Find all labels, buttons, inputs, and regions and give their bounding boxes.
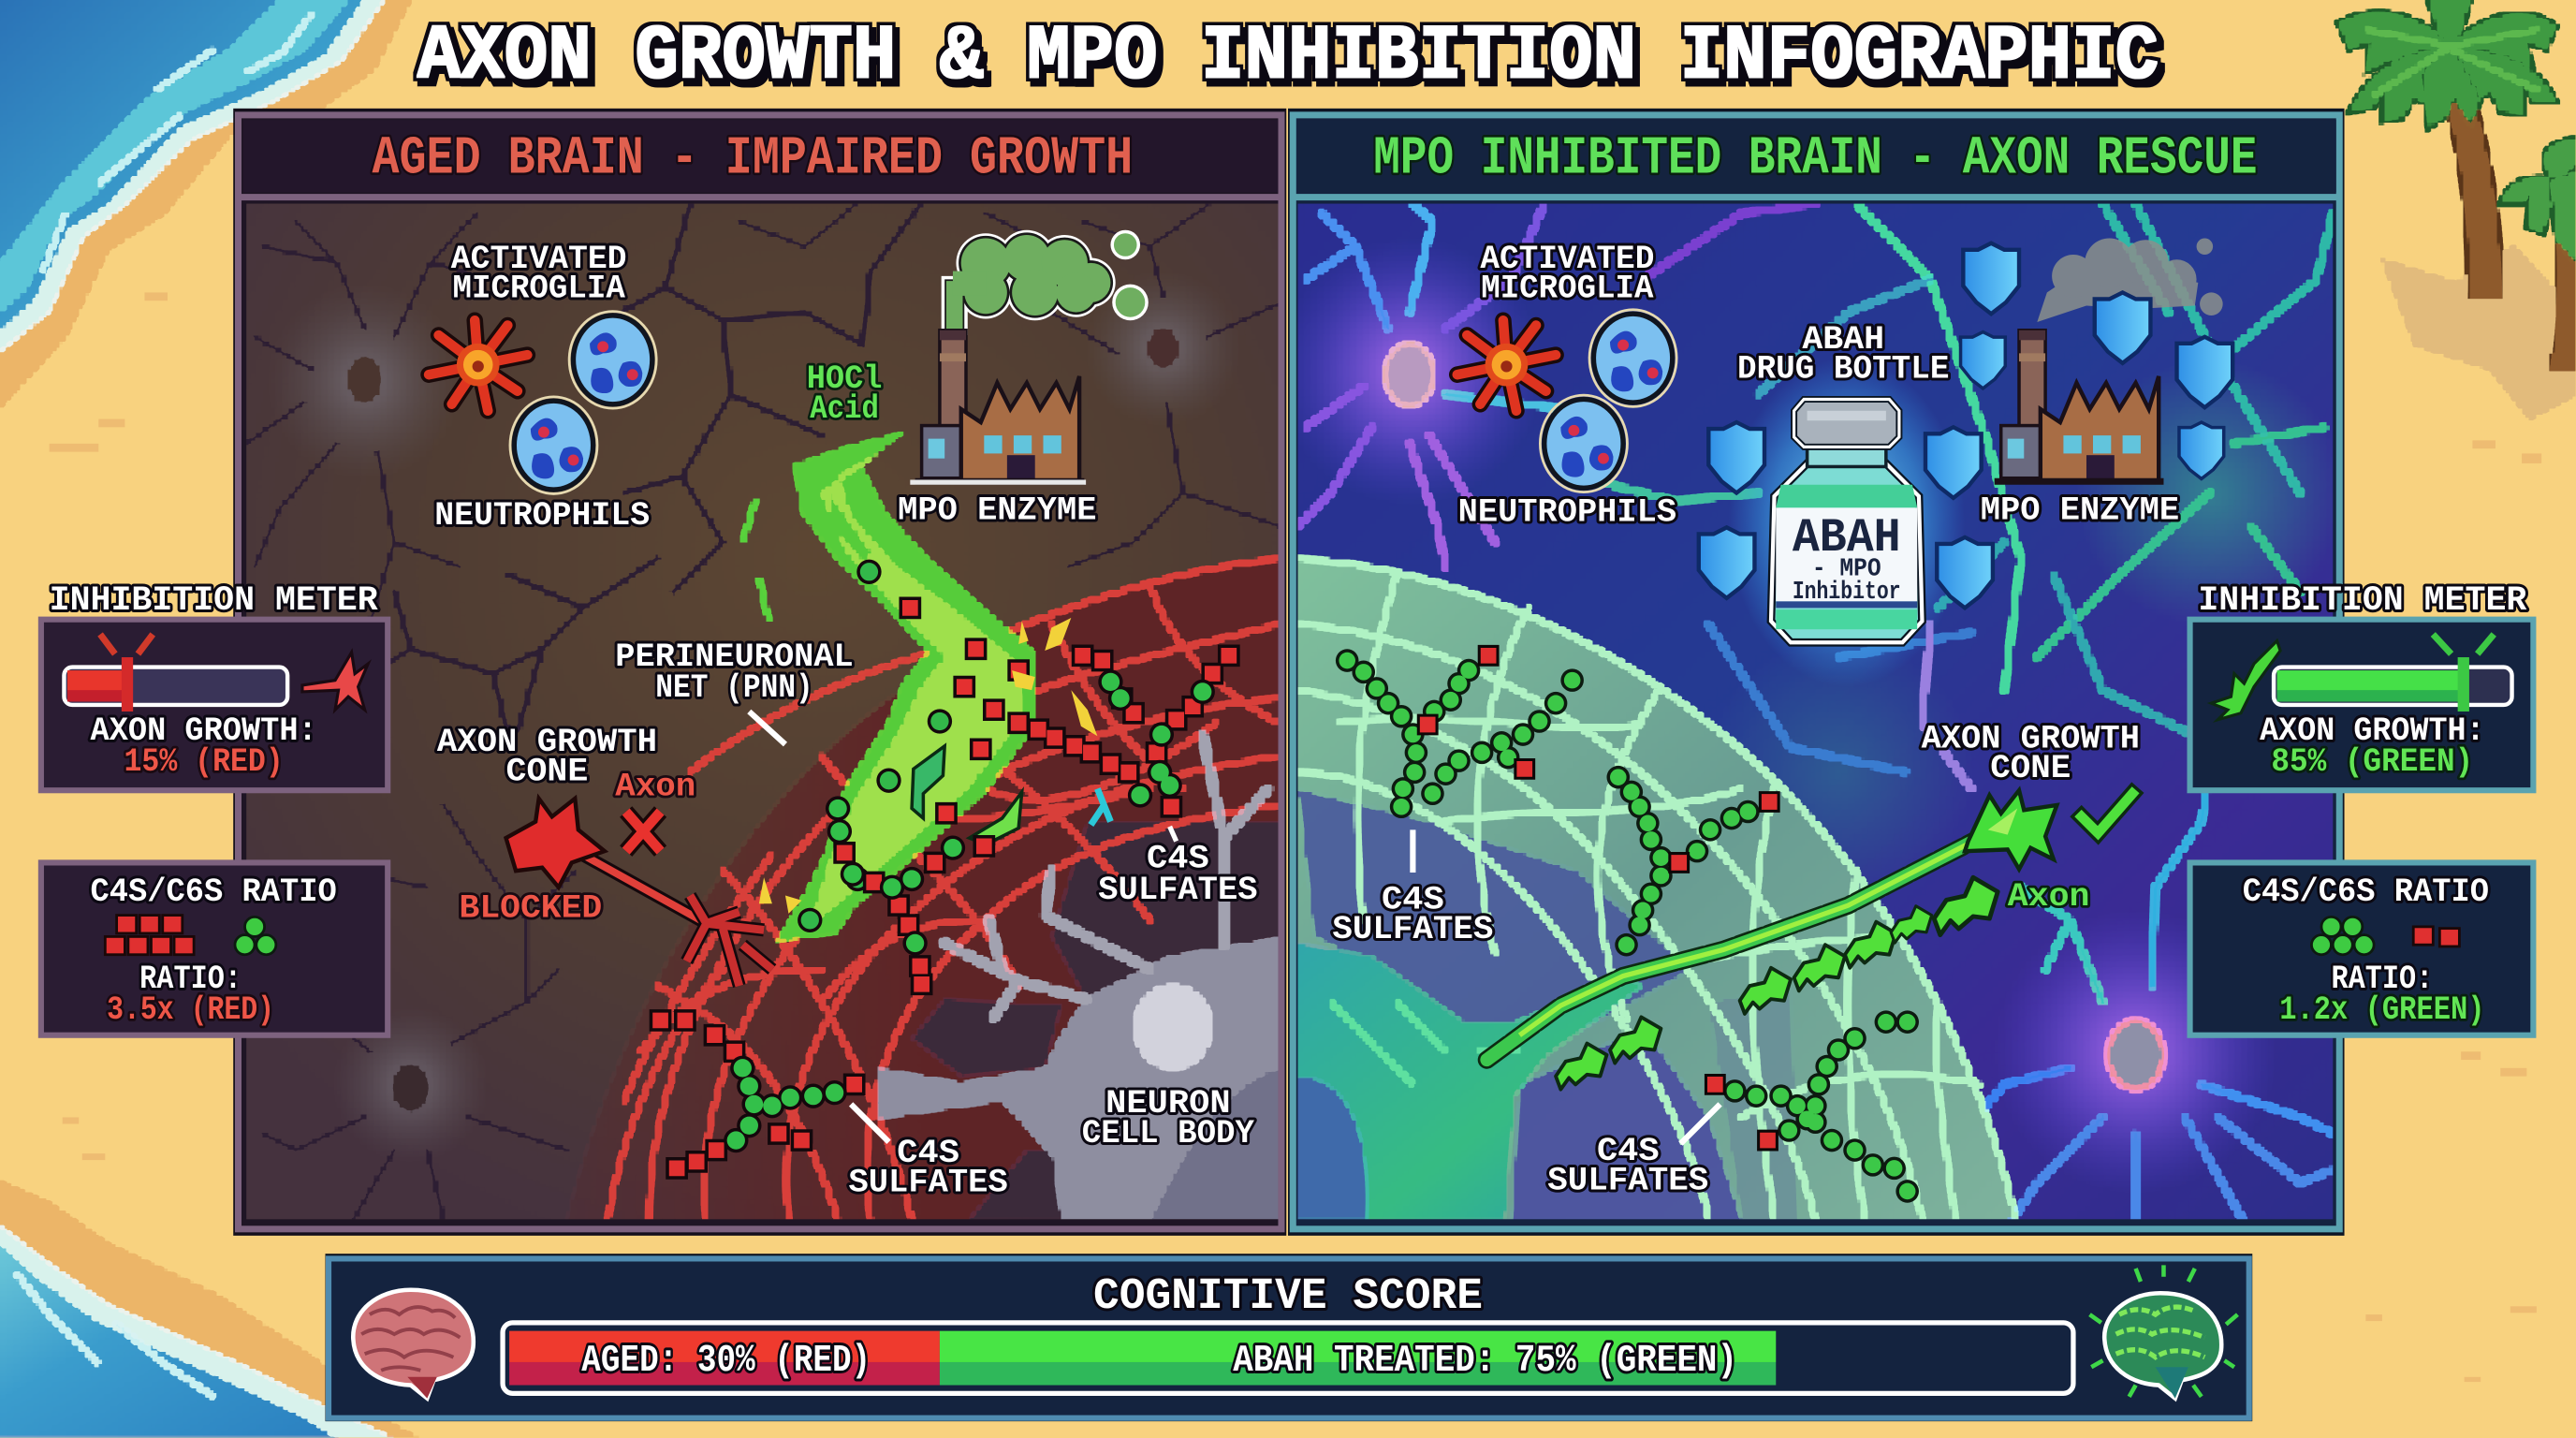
scene: aged brain tissue [246,204,1278,1219]
yellow sparks [759,618,1097,914]
heading: ratio: C4S/C6S RATIO [91,873,337,911]
label: neutrophils right: NEUTROPHILS [1458,493,1676,531]
label: activated microglia [451,241,627,308]
left inhibition meter [41,581,388,790]
chain: c4s center [838,809,984,984]
label: neuron cell body [1082,1085,1254,1152]
tissue background pixel layer [246,204,1278,1219]
heading: aged brain: AGED BRAIN - IMPAIRED GROWTH [373,128,1133,189]
icon: aged brain [353,1290,474,1399]
palm trunk second [2550,198,2576,372]
icon: abah drug bottle [1728,359,1965,687]
label: perineuronal net [615,638,854,707]
heading: ratio right: C4S/C6S RATIO [2243,873,2489,911]
icon: microglia right [1457,320,1556,411]
label: c4s sulfates lower: C4S [897,1135,959,1172]
icon: check mark [2082,794,2132,833]
label: c4s sulfates upper left [1332,882,1493,948]
label: perineuronal net: NET (PNN) [655,669,813,707]
label: axon right: Axon [2008,878,2089,916]
text: 15 percent: 15% (RED) [124,743,284,781]
acid stream arrows [912,746,1022,844]
beach water: top left [0,0,411,407]
scene: rescued brain tissue [1278,204,2341,1219]
icon: neutrophil lower [510,397,597,493]
protective shields [1699,243,2232,608]
icon: microglia left [429,320,527,411]
label: activated microglia right: MICROGLIA [1481,271,1654,308]
red sulfate blocks [2413,927,2459,946]
label: axon growth cone right: CONE [1990,750,2071,787]
icon: blocked x [626,812,661,851]
right inhibition meter [2190,581,2533,790]
text: ratio: RATIO: [2331,961,2433,998]
text: axon growth: AXON GROWTH: [91,712,317,750]
label: axon growth cone right [1922,721,2140,787]
palm trunk main [2443,85,2502,299]
icon: abah drug bottle: - MPO [1812,554,1881,583]
text: ratio value: 1.2x (GREEN) [2279,991,2485,1029]
panel frame right [1288,109,2345,1236]
chain: c4s upper right [1018,655,1229,825]
label: c4s sulfates lower right [1547,1133,1708,1200]
pointer: c4s lower [851,1104,889,1142]
label: activated microglia: MICROGLIA [453,271,626,308]
heading: inhibition meter left: INHIBITION METER [50,581,379,621]
neuron cell body [877,735,1278,1219]
acid stream [742,433,1036,942]
label: c4s sulfates lower [849,1135,1008,1201]
label: hocl acid: Acid [810,390,879,428]
heading: mpo inhibited: MPO INHIBITED BRAIN - AXON RESCUE [1373,128,2258,189]
label: neuron cell body: CELL BODY [1082,1115,1254,1152]
text: 85 percent: 85% (GREEN) [2271,743,2473,781]
teal neuron body [1298,943,1643,1219]
icon: healthy brain [2089,1265,2237,1399]
blocked axon and growth cone [506,799,772,986]
icon: abah drug bottle: Inhibitor [1793,578,1901,607]
label: perineuronal net: PERINEURONAL [615,638,854,676]
label: abah drug bottle: DRUG BOTTLE [1737,351,1949,389]
palm trees [2338,0,2576,419]
label: axon growth cone right: AXON GROWTH [1922,721,2140,758]
panel box [2190,620,2533,790]
panel box [2190,862,2533,1035]
palm fronds second [2500,138,2576,263]
label: activated microglia right [1480,241,1654,308]
text: ratio: RATIO: [139,961,242,998]
acid beads [810,572,1018,920]
green perineuronal net dome [1298,559,2016,1219]
text: axon growth: AXON GROWTH: [2260,712,2485,750]
label: axon growth cone [437,724,657,791]
glowing neurons [1278,204,2341,1219]
beach water: bottom left [0,1181,417,1438]
panel: mpo inhibited brain [1278,109,2345,1236]
tissue background pixel layer [1278,204,2341,1219]
pointer: c4s lower right [1680,1104,1720,1144]
score bar [503,1323,2073,1393]
heading: cognitive score: COGNITIVE SCORE [1093,1272,1483,1322]
icon: mpo factory with green smoke [910,230,1149,485]
palm fronds main [2338,0,2556,128]
text: ratio value: 3.5x (RED) [107,991,274,1029]
label: c4s sulfates upper: SULFATES [1098,872,1258,909]
panel frame left [233,109,1286,1236]
label: neuron cell body: NEURON [1105,1085,1231,1123]
pointer: c4s upper [1170,827,1177,842]
label: c4s sulfates upper left: C4S [1382,882,1444,919]
label: axon growth cone: AXON GROWTH [437,724,657,761]
label: c4s sulfates upper: C4S [1147,841,1209,878]
chain: c4s upper left [1347,655,1573,807]
meter bar [2274,634,2512,712]
growth arrows [1556,877,1998,1090]
label: c4s sulfates lower right: C4S [1597,1133,1660,1170]
left ratio panel [41,862,388,1035]
panel box [326,1254,2252,1421]
red sulfate blocks [105,916,194,955]
icon: neutrophil upper right [1589,310,1676,406]
label: blocked: BLOCKED [460,889,602,927]
label: activated microglia: ACTIVATED [451,241,627,278]
label: hocl acid [807,360,882,428]
green sulfate blocks [2311,917,2374,955]
label: activated microglia right: ACTIVATED [1480,241,1654,278]
text: treated score: ABAH TREATED: 75% (GREEN) [1233,1340,1737,1383]
pointer: perineuronal net [749,712,785,744]
label: abah drug bottle: ABAH [1802,321,1884,359]
green sulfate blocks [235,917,276,955]
label: neutrophils: NEUTROPHILS [434,497,650,535]
text: aged score: AGED: 30% (RED) [581,1340,871,1383]
icon: abah drug bottle: ABAH [1793,512,1901,565]
palm shadow [2382,246,2576,419]
label: hocl acid: HOCl [807,360,882,398]
label: mpo enzyme right: MPO ENZYME [1981,492,2179,530]
icon: neutrophil lower right [1540,395,1627,492]
panel: aged brain [233,109,1286,1236]
rescued axon and growth cone [1486,790,2056,1060]
icon: growing axon [2211,640,2280,720]
chain: c4s lower [661,1020,855,1168]
right ratio panel [2190,862,2533,1035]
label: mpo enzyme: MPO ENZYME [898,492,1097,530]
icon: mpo factory with grey smoke [1995,238,2223,485]
icon: stunted axon [302,653,368,710]
heading: inhibition meter right: INHIBITION METER [2198,581,2527,621]
sand speckles [50,292,2541,1382]
red perineuronal net dome [567,559,1278,1219]
panel: cognitive score [326,1254,2252,1421]
pointer: c4s upper left [1412,829,1414,873]
label: c4s sulfates upper [1098,841,1258,909]
panel box [41,862,388,1035]
icon: neutrophil upper [569,312,656,408]
chain: c4s middle [1618,777,1769,945]
label: c4s sulfates lower right: SULFATES [1547,1163,1708,1200]
chain: c4s lower right [1715,1022,1908,1191]
panel box [41,620,388,790]
title: AXON GROWTH & MPO INHIBITION INFOGRAPHIC [417,12,2159,100]
label: axon growth cone: CONE [506,754,588,791]
label: axon: Axon [615,768,695,805]
label: c4s sulfates upper left: SULFATES [1332,911,1493,948]
label: abah drug bottle [1737,321,1949,389]
dim neurons [270,272,1238,1160]
meter bar [64,634,287,712]
label: c4s sulfates lower: SULFATES [849,1164,1008,1201]
